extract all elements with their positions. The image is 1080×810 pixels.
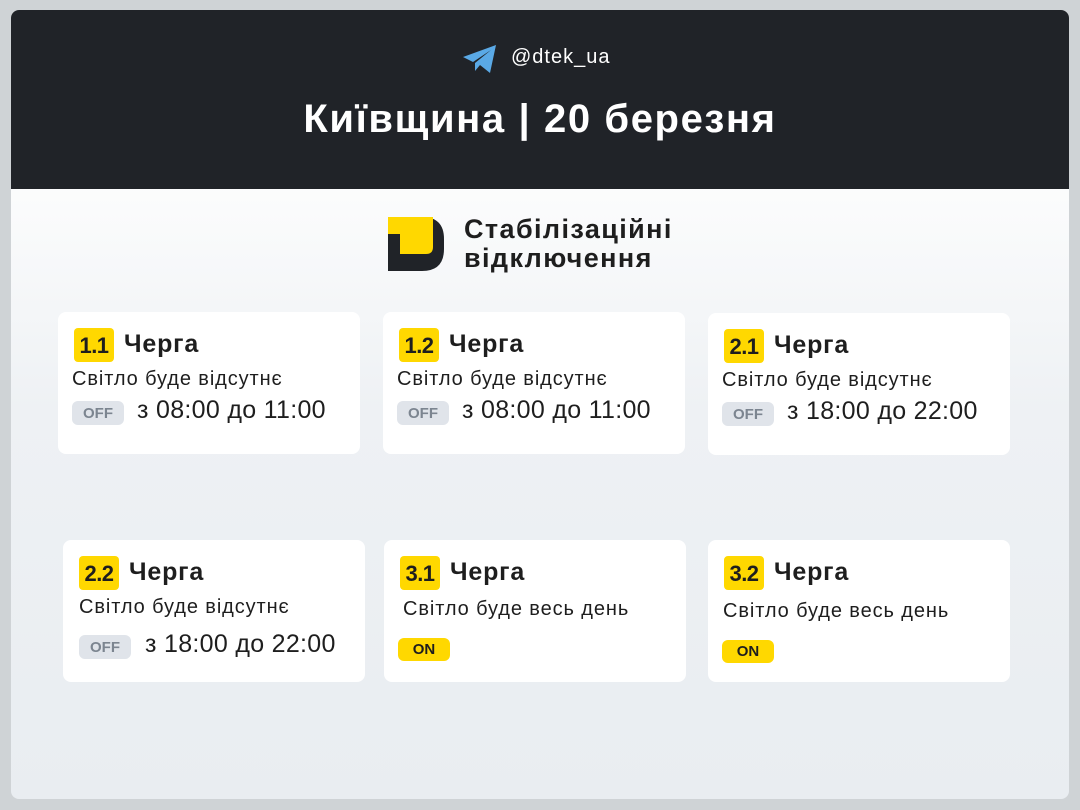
card 2.2: Світло буде відсутнє [79, 596, 290, 618]
card 1.2: 1.2 [404, 333, 434, 358]
icon: telegram [463, 45, 496, 73]
card 2.2: 2.2 [84, 561, 114, 586]
card 2.1: 2.1 [729, 334, 759, 359]
card 3.2: Черга [774, 558, 849, 586]
card 2.2: з 18:00 до 22:00 [145, 630, 336, 658]
card 2.1 [708, 313, 1010, 455]
card 3.1: Черга [450, 558, 525, 586]
card 1.1: Світло буде відсутнє [72, 368, 283, 390]
card 1.1: OFF [83, 405, 113, 422]
section heading with logo [388, 214, 673, 273]
card 3.2: ON [737, 643, 759, 660]
card 2.1: OFF [733, 406, 763, 423]
card 2.2: OFF [90, 639, 120, 656]
card 1.2 [383, 312, 685, 454]
card 1.1 [58, 312, 360, 454]
header band [11, 10, 1069, 189]
card 1.2: з 08:00 до 11:00 [462, 396, 651, 424]
heading text: Стабілізаційні [464, 214, 673, 244]
card 1.1: 1.1 [79, 333, 109, 358]
card 3.1 [384, 540, 686, 682]
card 2.1: з 18:00 до 22:00 [787, 397, 978, 425]
card 3.2 [708, 540, 1010, 682]
card 2.1: Черга [774, 331, 849, 359]
heading text: відключення [464, 243, 653, 273]
icon: DTEK logo [388, 217, 444, 271]
card 1.1: Черга [124, 330, 199, 358]
card 1.2: OFF [408, 405, 438, 422]
card 1.2: Черга [449, 330, 524, 358]
title: Київщина | 20 березня [303, 97, 777, 141]
card 2.2 [63, 540, 365, 682]
card 2.1: Світло буде відсутнє [722, 369, 933, 391]
card 3.1: ON [413, 641, 435, 658]
card 1.2: Світло буде відсутнє [397, 368, 608, 390]
telegram handle [463, 45, 610, 73]
heading text [464, 214, 673, 273]
card 1.1: з 08:00 до 11:00 [137, 396, 326, 424]
card 3.2: Світло буде весь день [723, 600, 949, 622]
card 3.1: 3.1 [405, 561, 435, 586]
handle text: @dtek_ua [511, 46, 610, 68]
card 3.2: 3.2 [729, 561, 759, 586]
card 3.1: Світло буде весь день [403, 598, 629, 620]
card 2.2: Черга [129, 558, 204, 586]
